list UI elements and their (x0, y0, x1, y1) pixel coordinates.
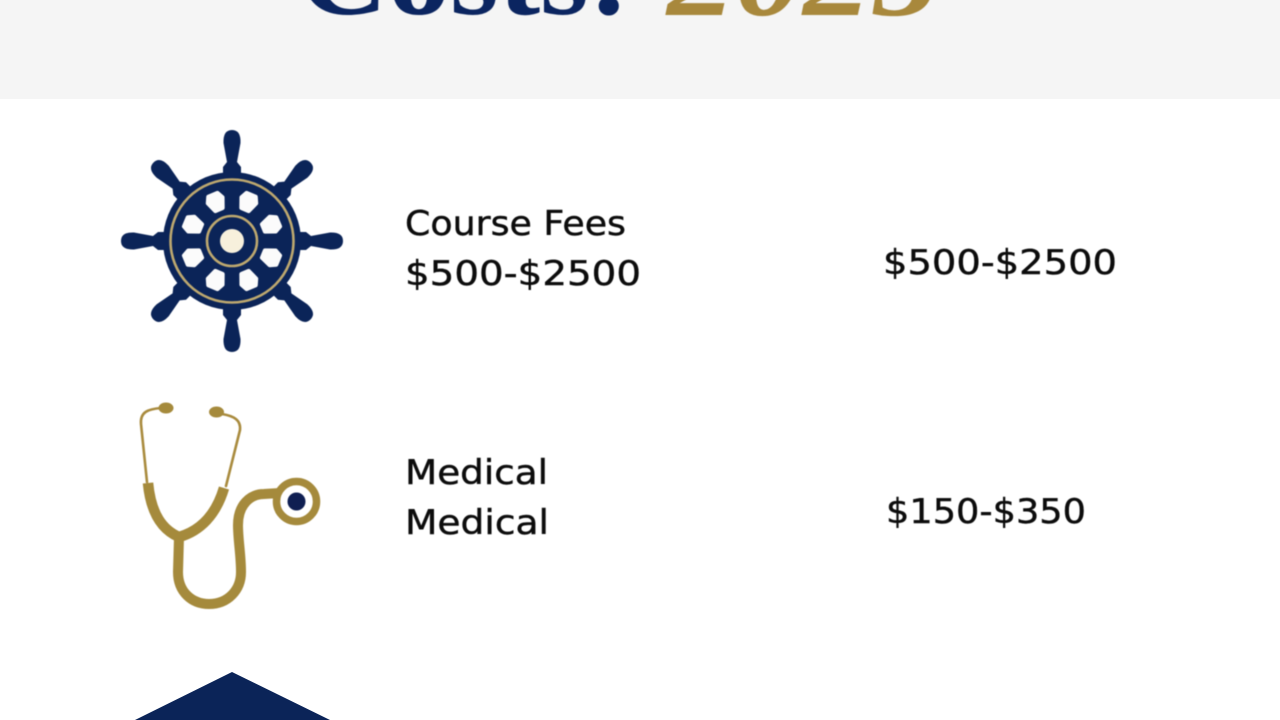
row value: medical: $150-$350 (886, 492, 1086, 532)
row label: course fees: Course Fees (405, 204, 626, 244)
row label: medical: Medical (405, 503, 549, 543)
icon: graduation cap top (135, 672, 330, 720)
icon: ship wheel (121, 130, 343, 352)
row value: course fees: $500-$2500 (883, 243, 1117, 283)
row label: medical (405, 453, 549, 543)
row label: medical: Medical (405, 453, 548, 493)
header band (0, 0, 1280, 99)
icon: stethoscope (141, 402, 316, 604)
row label: course fees (405, 204, 641, 294)
row label: course fees: $500-$2500 (405, 254, 641, 294)
